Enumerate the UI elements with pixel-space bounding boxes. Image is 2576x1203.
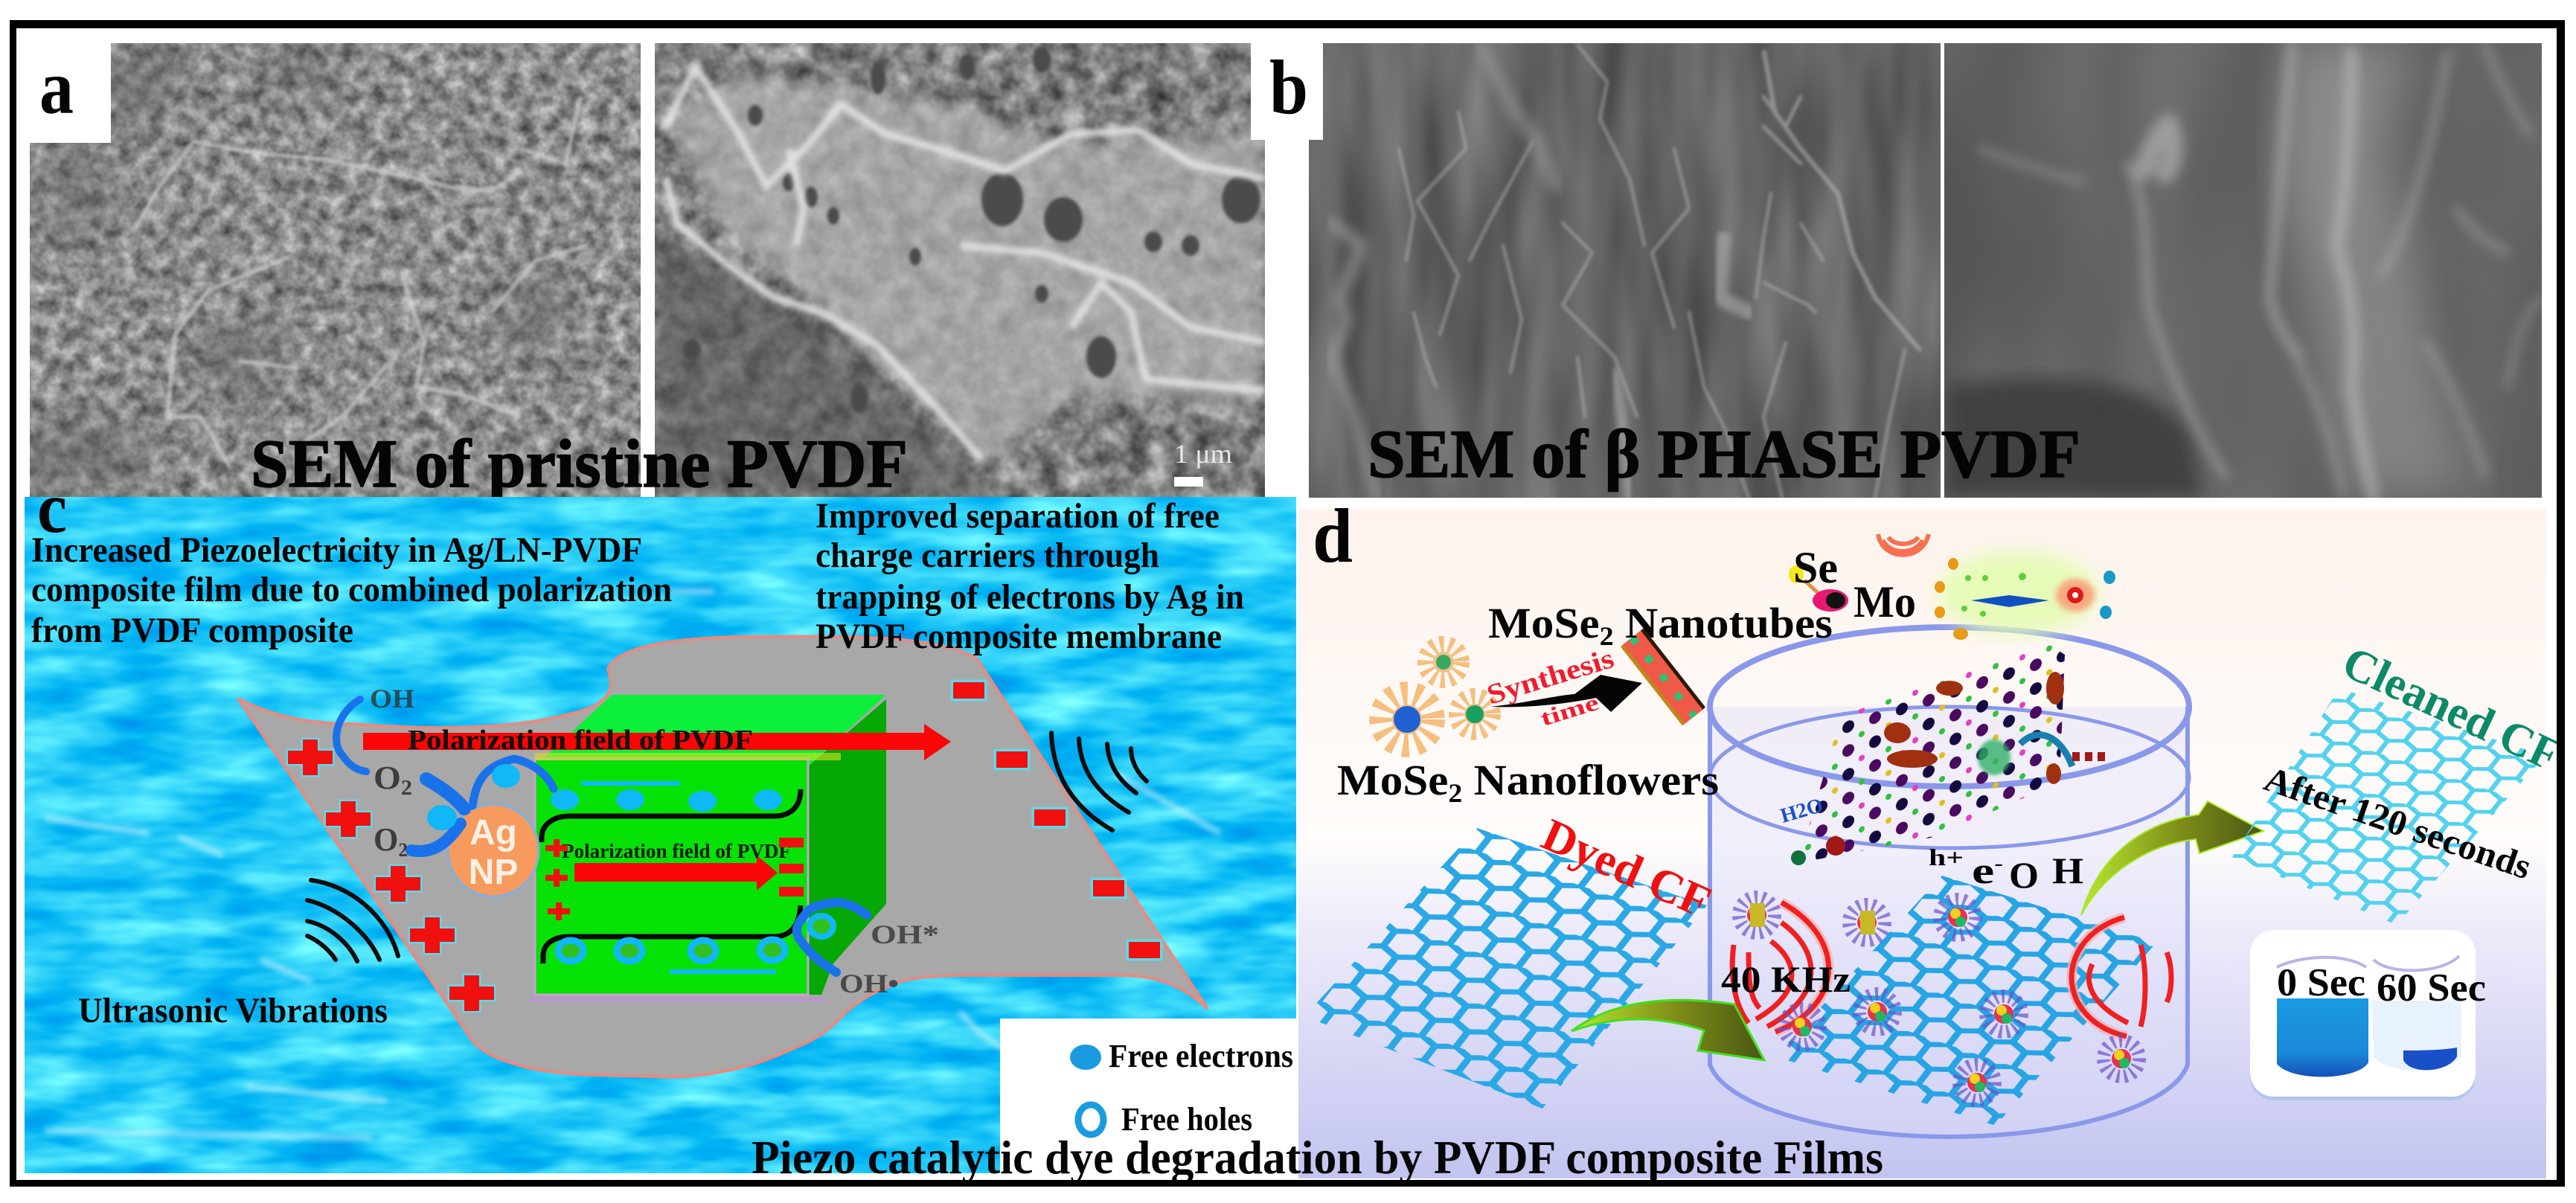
free electrons in block	[551, 781, 782, 974]
label: MoSe2 nanoflowers: MoSe	[1337, 756, 1443, 804]
text: improved separation: trapping of electrons by Ag in	[816, 577, 1244, 617]
panel letter a: a	[39, 45, 74, 130]
label: after 120 seconds: After 120 seconds	[2259, 759, 2536, 887]
negative charges on sheet	[953, 682, 1160, 958]
text: improved separation: PVDF composite membrane	[816, 617, 1222, 656]
charge labels: O	[2009, 854, 2039, 896]
element labels with atoms: Mo	[1853, 577, 1916, 626]
nanoflowers	[1383, 646, 1491, 743]
radical species labels: O	[374, 821, 399, 858]
panel background	[1298, 509, 2546, 1178]
charge labels: e	[1972, 850, 1988, 891]
green arrow into beaker	[1571, 1000, 1764, 1060]
membrane sheet	[238, 636, 1208, 1077]
radical species labels: OH•	[839, 969, 899, 998]
legend: Free holes	[1121, 1101, 1252, 1138]
radical species labels	[370, 684, 939, 998]
positive charges on sheet	[288, 740, 494, 1011]
MoSe2 lattice	[1791, 644, 2106, 865]
vial comparison: 0 Sec	[2277, 961, 2365, 1004]
scale bar	[1174, 439, 1232, 487]
radical species labels: 2	[398, 839, 408, 861]
radical generation glow	[1935, 551, 2115, 640]
green arrow out of beaker	[2081, 801, 2263, 915]
legend: Free electrons	[1109, 1038, 1293, 1074]
charge labels: H	[2052, 850, 2083, 891]
charge labels: -	[1994, 853, 2003, 874]
panel c: piezoelectric mechanism on water background	[25, 468, 1298, 1175]
inner polarization arrow: Polarization field of PVDF	[562, 840, 791, 862]
panel d: dye degradation on carbon fibre	[1298, 493, 2568, 1178]
label: MoSe2 nanotubes: 2	[1600, 621, 1614, 651]
legend	[1000, 1018, 1298, 1175]
text: increased piezoelectricity: Increased Piezoelectricity in Ag/LN-PVDF	[31, 530, 642, 570]
blue electron transfer arrows	[336, 699, 867, 972]
label: cleaned CF: Cleaned CF	[2335, 637, 2568, 781]
SEM micrograph a, low magnification	[0, 37, 641, 498]
synthesis arrow: time	[1537, 690, 1602, 731]
SEM micrograph b, low magnification	[1309, 43, 1941, 498]
label: MoSe2 nanotubes: MoSe	[1488, 599, 1594, 647]
dyed carbon fibre mesh	[1304, 828, 1707, 1109]
element labels with atoms: Se	[1793, 543, 1838, 592]
text: improved separation: Improved separation of free	[816, 496, 1220, 536]
caption: SEM of beta phase PVDF: SEM of β PHASE PVDF	[1368, 416, 2080, 492]
radical species labels: OH*	[871, 920, 939, 949]
radical species labels: 2	[401, 777, 412, 800]
nanoflowers on mesh	[1739, 897, 2139, 1100]
caption: SEM of pristine PVDF: SEM of pristine PVDF	[251, 426, 908, 501]
red ultrasound rings right	[2072, 917, 2171, 1036]
ultrasonic wave arcs left	[307, 880, 398, 961]
text: increased piezoelectricity: from PVDF composite	[31, 611, 353, 650]
inner polarization arrow	[562, 840, 791, 891]
cleaned carbon fibre mesh	[2232, 688, 2545, 925]
big polarization arrow	[363, 724, 951, 760]
panel letter c: c	[37, 468, 67, 548]
label: 40 KHz: 40 KHz	[1721, 958, 1851, 1000]
free holes in block	[558, 940, 785, 961]
nanotube	[1622, 629, 1704, 725]
SEM micrograph b, high magnification	[1944, 43, 2542, 498]
green semiconductor block	[529, 695, 886, 1000]
panel a: SEM of pristine PVDF	[0, 37, 1265, 501]
panel b: SEM of beta phase PVDF	[1269, 43, 2542, 498]
ultrasonic wave arcs right	[1051, 733, 1147, 830]
big polarization arrow: Polarization field of PVDF	[408, 725, 753, 756]
synthesis arrow: Synthesis	[1483, 643, 1618, 711]
panel letter b: b	[1269, 45, 1308, 130]
Ag nanoparticle: NP	[469, 853, 518, 892]
carbon fibre mesh in beaker	[1775, 876, 2156, 1126]
vial comparison: 60 Sec	[2377, 966, 2486, 1010]
text: increased piezoelectricity	[31, 530, 672, 650]
label: MoSe2 nanoflowers: Nanoflowers	[1462, 756, 1719, 804]
text: improved separation	[816, 496, 1244, 656]
charge labels: h+	[1929, 844, 1964, 870]
label: MoSe2 nanoflowers: 2	[1448, 778, 1462, 808]
band edge lines	[542, 789, 801, 963]
beaker	[1710, 627, 2189, 1137]
element labels with atoms	[1789, 543, 1916, 626]
panel letter d: d	[1313, 493, 1353, 579]
text: improved separation: charge carriers through	[816, 536, 1159, 575]
synthesis arrow	[1483, 643, 1642, 731]
text: increased piezoelectricity: composite film due to combined polarization	[31, 570, 672, 609]
radical species labels: OH	[370, 684, 414, 713]
electrons and hole near arrows	[427, 764, 833, 937]
Ag nanoparticle: Ag	[470, 813, 517, 853]
small label: H2O: H2O	[1778, 794, 1826, 828]
red ultrasound rings left	[1732, 902, 1829, 1032]
water background	[25, 497, 1296, 1173]
scale bar: 1 μm	[1174, 439, 1232, 469]
label: MoSe2 nanotubes: Nanotubes	[1614, 599, 1833, 647]
ultrasound source icon	[1878, 534, 1929, 555]
radical species labels: O	[374, 760, 399, 796]
inner charges	[545, 838, 804, 920]
charge labels	[1929, 844, 2083, 896]
figure title: Piezo catalytic dye degradation by PVDF composite Films	[752, 1131, 1883, 1184]
Ag nanoparticle	[448, 804, 539, 896]
label: ultrasonic vibrations: Ultrasonic Vibrations	[78, 991, 388, 1030]
label: dyed CF: Dyed CF	[1534, 809, 1718, 928]
SEM micrograph a, high magnification	[655, 43, 1265, 498]
vial comparison	[2250, 930, 2486, 1100]
